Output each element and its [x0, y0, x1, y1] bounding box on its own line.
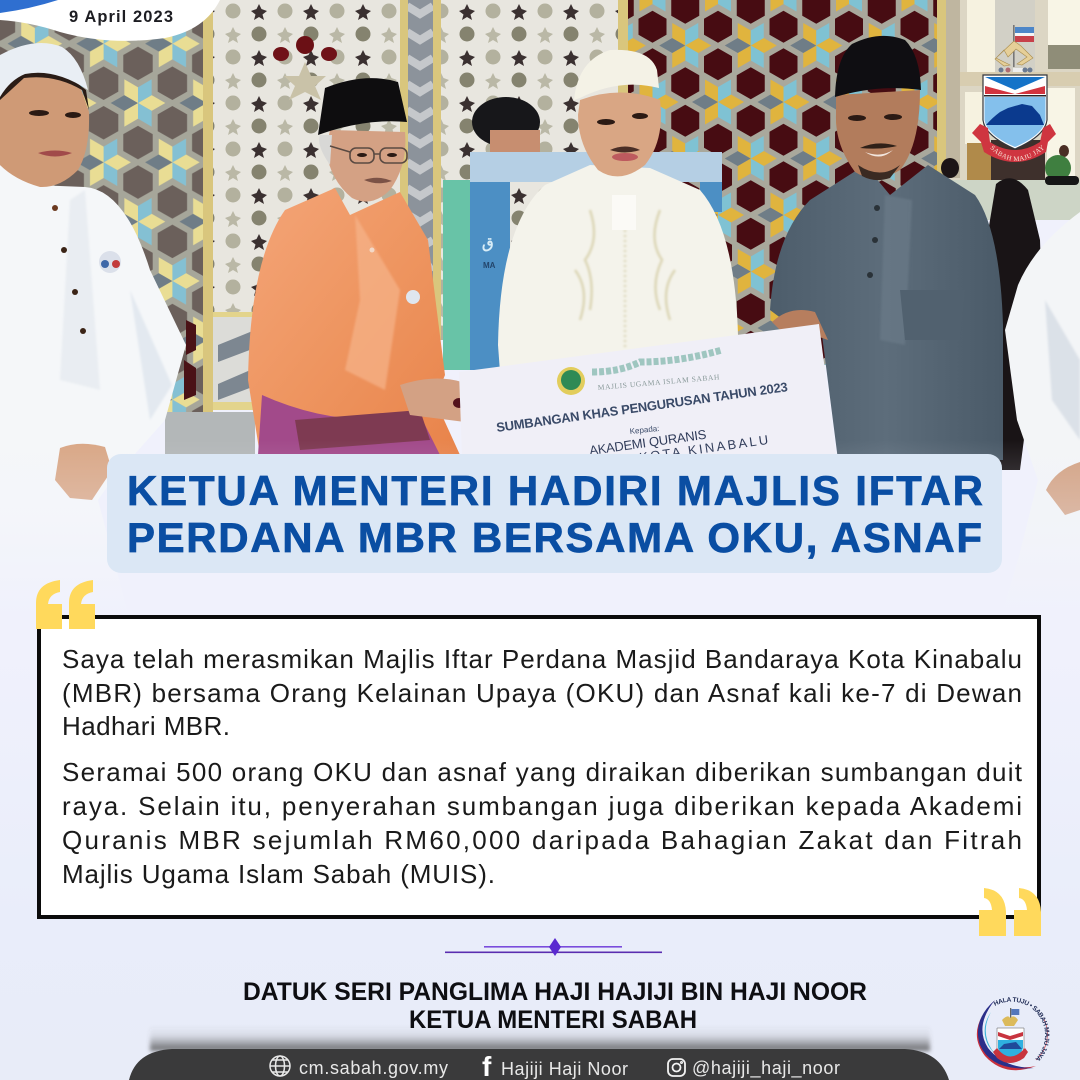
white carved lattice screen left	[213, 0, 400, 315]
paragraph 2: Seramai 500 orang OKU dan asnaf yang diraikan diberikan sumbangan duit	[62, 757, 1023, 787]
board emblem	[557, 367, 585, 395]
golden arms	[995, 41, 1033, 66]
blue corner swoosh	[0, 0, 60, 14]
footer shadow	[150, 1026, 930, 1051]
head of figure behind	[941, 158, 959, 178]
icon: globe	[270, 1056, 290, 1076]
wreath	[998, 68, 1032, 72]
small crest	[993, 1008, 1028, 1063]
stone base	[165, 412, 255, 472]
photo: mosque interior with five men and donation board	[0, 0, 1080, 620]
website: cm.sabah.gov.my	[299, 1058, 448, 1078]
seated figure in green	[1045, 145, 1079, 185]
shield	[983, 75, 1047, 149]
date text: 9 April 2023	[69, 8, 173, 26]
lattice large star and red inlays	[273, 36, 570, 100]
maroon hexagonal tile wall	[628, 0, 937, 365]
footer bar	[129, 1049, 949, 1080]
background person and blue banner: ق	[482, 235, 494, 252]
ring text: HALA TUJU • SABAH MAJU JAYA	[993, 997, 1050, 1061]
ring crescents	[977, 1001, 1036, 1070]
gold pillar trim	[203, 0, 946, 412]
person 2: orange baju with black songkok	[248, 78, 480, 455]
Sabah state crest	[972, 25, 1056, 162]
board recipient label: Kepada:	[629, 424, 660, 436]
donation board: KOTA KINABALU	[638, 432, 769, 465]
paragraph 1	[62, 644, 1022, 741]
facebook name: Hajiji Haji Noor	[501, 1059, 628, 1079]
maroon tiles near base of left wall	[184, 298, 210, 400]
paragraph 2: Majlis Ugama Islam Sabah (MUIS).	[62, 859, 495, 889]
quote panel	[39, 617, 1039, 917]
closing quote mark	[979, 888, 1041, 936]
paragraph 2	[62, 757, 1023, 889]
paragraph 2: raya. Selain itu, penyerahan sumbangan juga diberikan kepada Akademi	[62, 791, 1022, 821]
ribbon	[972, 124, 1056, 162]
person 4: grey baju with black songkok	[770, 36, 1003, 460]
lower fade of the photo into background	[0, 440, 1080, 620]
dark figure behind	[985, 178, 1042, 470]
windows and far hall	[941, 0, 1080, 470]
paragraph 1: Hadhari MBR.	[62, 711, 230, 741]
paragraph 2: Quranis MBR sejumlah RM60,000 daripada Bahagian Zakat dan Fitrah	[62, 825, 1022, 855]
board title: SUMBANGAN KHAS PENGURUSAN TAHUN 2023	[495, 379, 789, 435]
left hexagonal tile wall	[0, 0, 205, 420]
opening quote mark	[36, 580, 95, 629]
lower stone panel with chevrons	[213, 312, 400, 410]
paragraph 1: (MBR) bersama Orang Kelainan Upaya (OKU) dan Asnaf kali ke-7 di Dewan	[62, 678, 1022, 708]
date badge	[0, 0, 220, 41]
donation board	[459, 324, 836, 465]
board organisation name: MAJLIS UGAMA ISLAM SABAH	[597, 372, 720, 392]
person 1: white baju with white cap	[0, 43, 186, 620]
headline panel	[107, 454, 1002, 573]
white date shape	[0, 0, 220, 41]
floor	[946, 180, 1080, 220]
person 5: white robe on right edge	[1000, 212, 1080, 620]
icon: instagram	[668, 1059, 685, 1076]
signatory name: DATUK SERI PANGLIMA HAJI HAJIJI BIN HAJI NOOR	[243, 978, 867, 1006]
background person and blue banner: MA	[483, 261, 496, 270]
white carved lattice screen right	[441, 0, 618, 340]
board calligraphy	[592, 350, 722, 372]
signatory title: KETUA MENTERI SABAH	[409, 1006, 697, 1034]
flag on pole	[1013, 25, 1034, 67]
paragraph 1: Saya telah merasmikan Majlis Iftar Perdana Masjid Bandaraya Kota Kinabalu	[62, 644, 1022, 674]
purple divider with diamond	[445, 938, 662, 956]
person 3: cream jubah with white cap	[498, 50, 738, 372]
board recipient: AKADEMI QURANIS	[588, 427, 708, 458]
inner ring line	[1036, 1019, 1047, 1060]
background person and blue banner	[443, 97, 722, 370]
headline line 2: PERDANA MBR BERSAMA OKU, ASNAF	[127, 514, 982, 561]
Hala Tuju Sabah Maju Jaya logo	[976, 997, 1050, 1070]
headline line 1: KETUA MENTERI HADIRI MAJLIS IFTAR	[127, 467, 983, 514]
instagram handle: @hajiji_haji_noor	[692, 1058, 840, 1079]
chevron pillar	[408, 0, 433, 340]
